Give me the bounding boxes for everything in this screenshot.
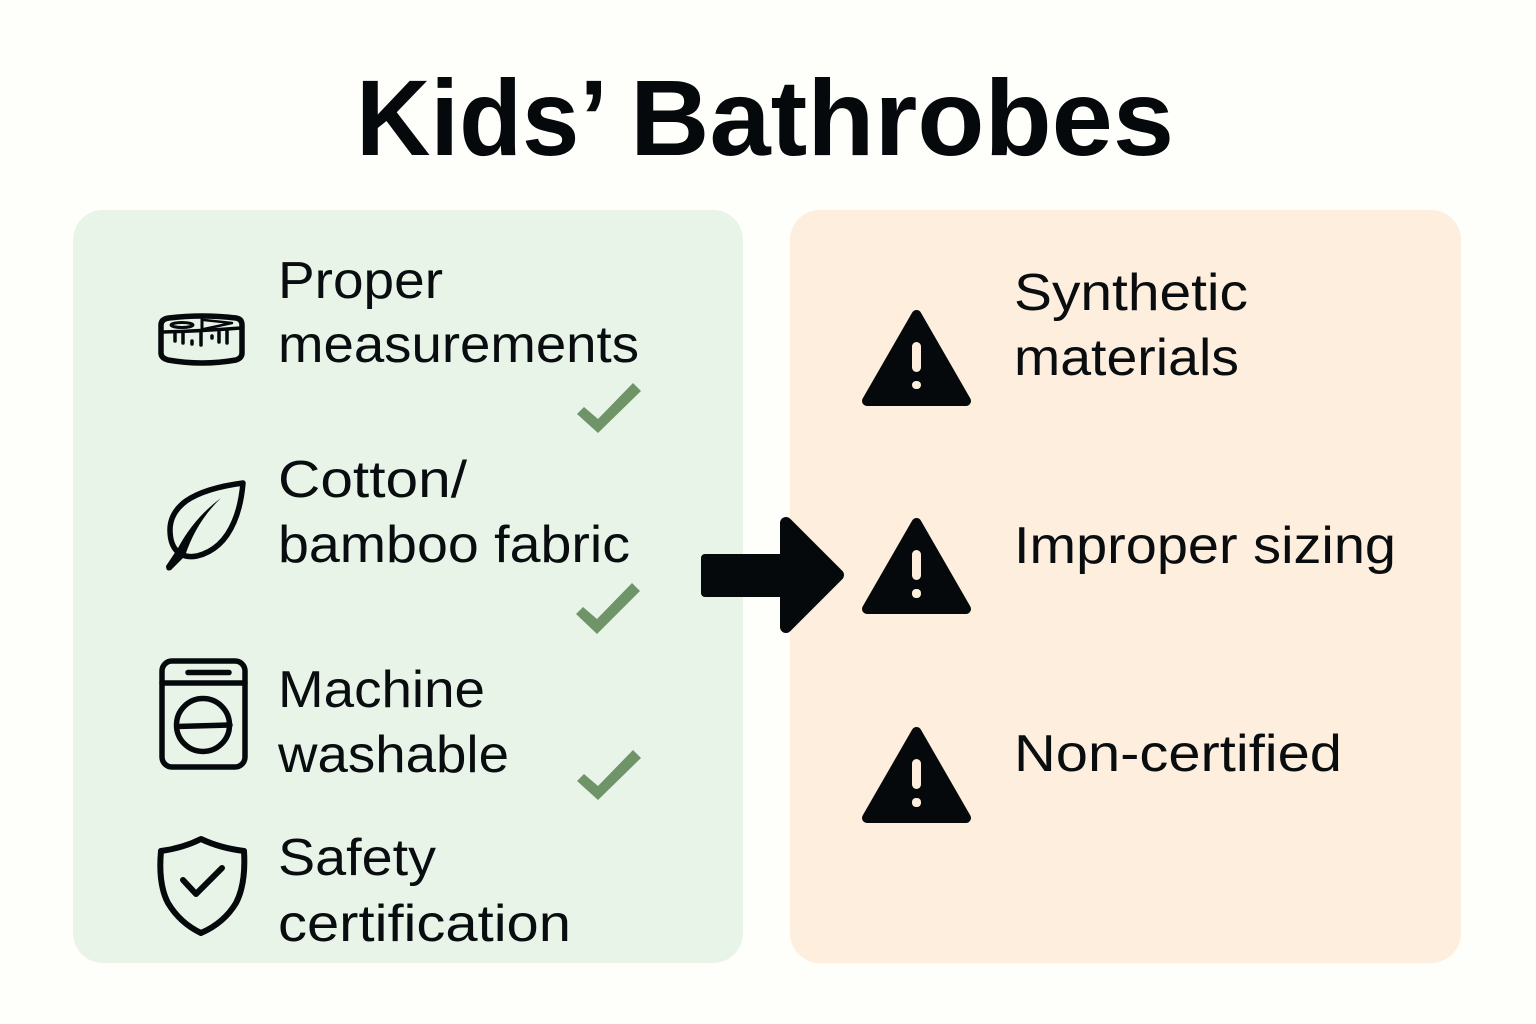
text: synthetic materials: Synthetic — [1014, 264, 1248, 322]
icon: safety shield — [160, 839, 244, 933]
text: proper measurements: Proper — [278, 252, 443, 310]
panel: recommended features — [73, 210, 743, 963]
text: non-certified: Non-certified — [1014, 725, 1342, 783]
icon: warning 2 — [867, 523, 966, 609]
text: cotton bamboo fabric: Cotton/ — [278, 451, 468, 509]
panel: things to avoid — [790, 210, 1461, 963]
title: Bathrobes — [630, 57, 1174, 178]
text: machine washable: Machine — [278, 661, 485, 719]
check mark 2 — [576, 583, 640, 634]
icon: washing machine — [162, 661, 245, 767]
icon: warning 1 — [867, 315, 966, 401]
text: machine washable — [277, 661, 509, 784]
text: safety certification — [278, 829, 571, 953]
title: Kids’ — [356, 57, 608, 178]
text: proper measurements: measurements — [278, 316, 639, 374]
text: machine washable: washable — [277, 726, 509, 784]
text: cotton bamboo fabric: bamboo fabric — [278, 516, 630, 574]
text: synthetic materials — [1014, 264, 1248, 387]
text: synthetic materials: materials — [1014, 329, 1239, 387]
text: cotton bamboo fabric — [278, 451, 630, 574]
text: safety certification: certification — [278, 895, 571, 953]
text: proper measurements — [278, 252, 639, 374]
icon: leaf — [166, 483, 243, 570]
title — [356, 57, 1174, 178]
arrow — [701, 523, 838, 627]
check mark 1 — [577, 383, 641, 433]
icon: measuring tape — [161, 316, 242, 363]
text: safety certification: Safety — [278, 829, 436, 887]
text: improper sizing: Improper sizing — [1014, 517, 1396, 575]
check mark 3 — [577, 750, 641, 800]
icon: warning 3 — [867, 732, 966, 818]
